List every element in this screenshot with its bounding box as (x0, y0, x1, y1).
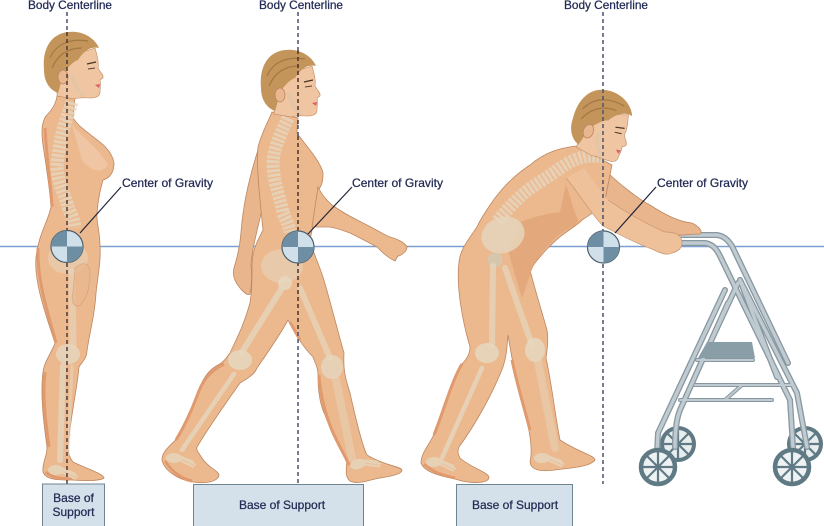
base of support box 3: Base of Support (472, 498, 559, 512)
label: center of gravity 1: Center of Gravity (122, 176, 213, 190)
centerline 2 (297, 12, 299, 484)
foot bones (48, 465, 78, 479)
far arm (605, 170, 701, 235)
centerline 1 (66, 12, 68, 484)
foot bones (426, 457, 456, 471)
shading (165, 322, 349, 481)
hanging arm and hand (72, 264, 90, 306)
shading (38, 128, 72, 479)
head (44, 32, 103, 99)
front arm (312, 187, 407, 261)
center of gravity marker 1 (51, 230, 83, 262)
skeleton (442, 156, 604, 458)
walker (641, 235, 821, 484)
body silhouette (421, 146, 612, 483)
shading (508, 184, 579, 298)
walker seat (698, 342, 755, 358)
figure 2: walking (162, 50, 407, 483)
head (261, 50, 320, 117)
horizontal gravity line (0, 246, 824, 248)
near arm and hand (566, 168, 682, 254)
base of support box 2 (194, 484, 364, 526)
walker frame (657, 235, 807, 453)
base of support box 1: Support (52, 505, 95, 519)
figure 3: stooped with walker (421, 82, 701, 483)
leader line 3 (615, 187, 656, 233)
walker rear wheels (662, 428, 821, 460)
body silhouette (36, 96, 114, 481)
foot bones (166, 453, 196, 467)
walker front wheels (641, 450, 809, 484)
base of support box 2: Base of Support (239, 498, 326, 512)
center of gravity marker 2 (282, 231, 314, 263)
label: center of gravity 3: Center of Gravity (657, 176, 748, 190)
center of gravity marker 3 (588, 231, 620, 263)
body silhouette (162, 112, 402, 483)
base of support box 1 (42, 484, 104, 526)
base of support box 3 (456, 484, 572, 526)
skeleton (48, 102, 88, 460)
centerline 3 (602, 12, 604, 484)
leader line 1 (80, 187, 121, 233)
label: center of gravity 2: Center of Gravity (352, 176, 443, 190)
leader line 2 (308, 187, 352, 234)
head (563, 82, 642, 166)
skeleton (182, 118, 352, 458)
figure 1: standing upright (36, 32, 114, 481)
rear arm and hand (233, 150, 262, 295)
base of support box 1: Base of (53, 491, 95, 505)
